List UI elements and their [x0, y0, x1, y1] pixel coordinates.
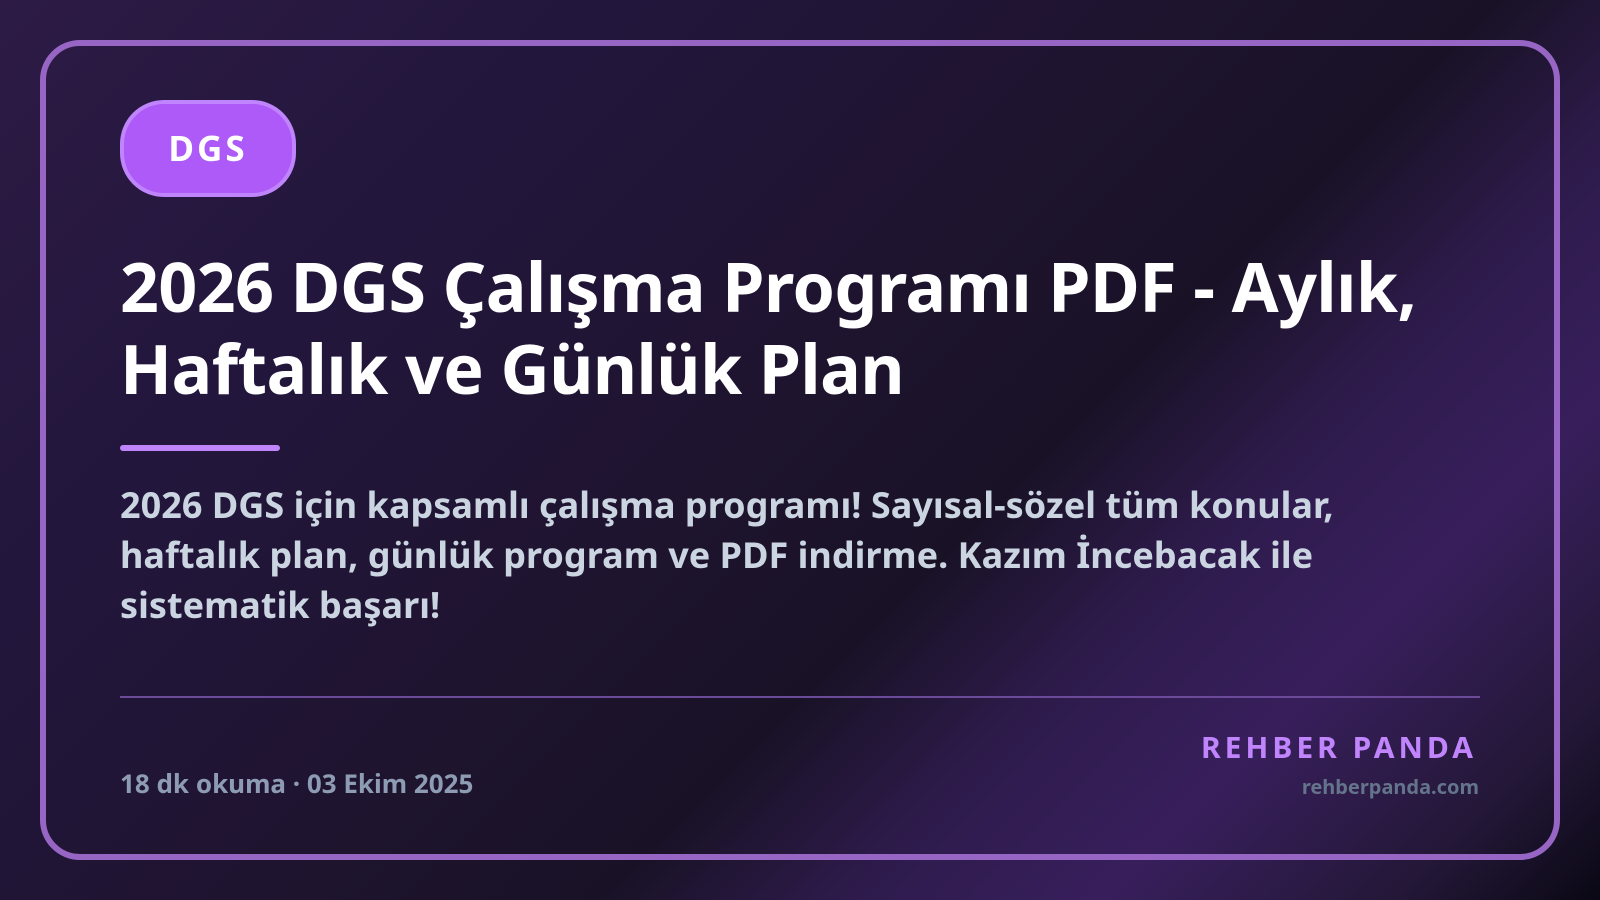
brand name: REHBER PANDA — [1201, 726, 1477, 767]
description text — [120, 480, 1334, 629]
title: 2026 DGS Çalışma Programı PDF - Aylık, — [120, 239, 1416, 332]
badge: category DGS — [120, 100, 296, 197]
description text: sistematik başarı! — [120, 580, 440, 629]
website: rehberpanda.com — [1302, 773, 1479, 800]
description text: haftalık plan, günlük program ve PDF indirme. Kazım İncebacak ile — [120, 530, 1313, 579]
title: Haftalık ve Günlük Plan — [120, 321, 904, 414]
description text: 2026 DGS için kapsamlı çalışma programı! Sayısal-sözel tüm konular, — [120, 480, 1334, 529]
accent bar — [120, 445, 280, 451]
reading time and date: 18 dk okuma · 03 Ekim 2025 — [120, 765, 473, 801]
footer divider — [120, 696, 1480, 698]
badge: category DGS: DGS — [168, 125, 248, 172]
title — [120, 239, 1416, 414]
